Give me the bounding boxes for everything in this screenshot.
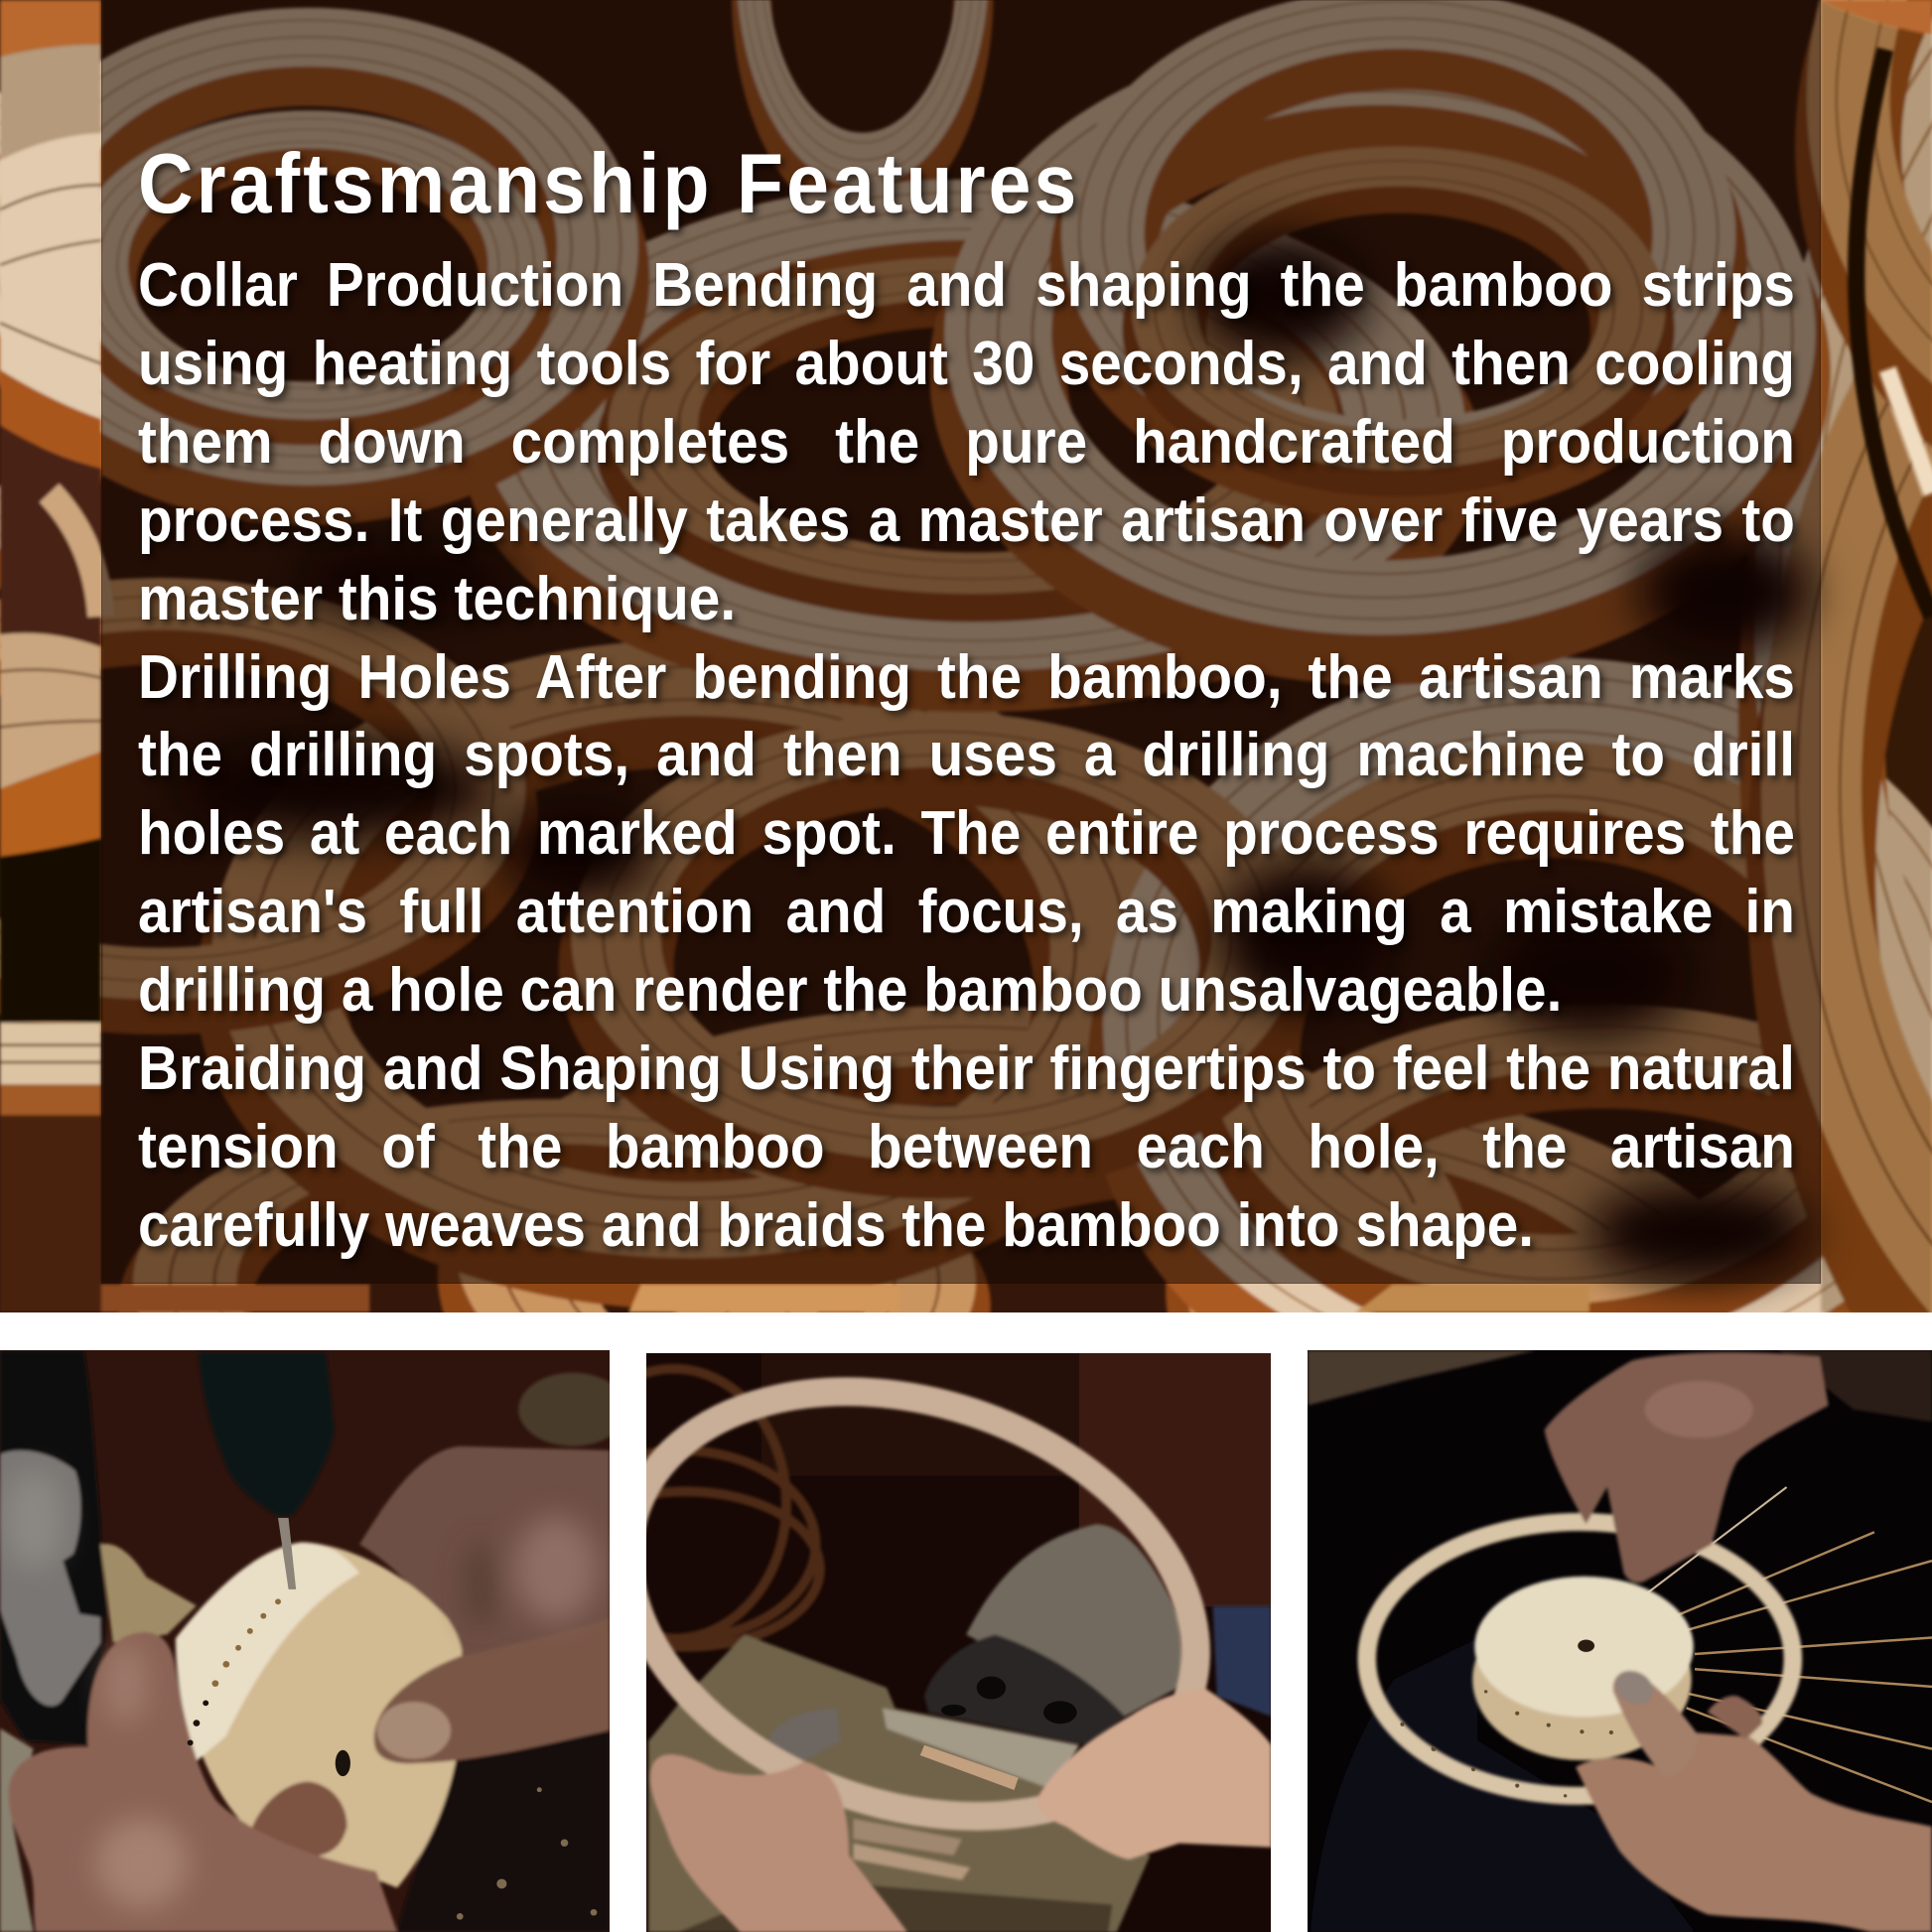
text block: braiding and shaping: Braiding and Shaping Using their fingertips to feel the natural [138,1035,1795,1103]
photo: bending a bamboo hoop over a heater [646,1353,1271,1932]
text block: collar production: them down completes the pure handcrafted production [138,408,1795,477]
text block: drilling holes: artisan's full attention and focus, as making a mistake in [138,878,1795,946]
title: Craftsmanship Features [138,137,1079,231]
background photo: stacked bent bamboo rings [0,0,1932,1312]
dark gaps between stacked rings [173,234,1811,1282]
text block: braiding and shaping [138,1035,1799,1266]
text block: drilling holes: drilling a hole can render the bamboo unsalvageable. [138,956,1562,1025]
text block: braiding and shaping: tension of the bamboo between each hole, the artisan [138,1113,1795,1181]
right edge tint and streaks [1821,0,1932,1312]
text block: drilling holes [138,643,1799,1031]
left edge colour bands [0,0,101,57]
text block: collar production: master this technique. [138,565,736,633]
photo: weaving bamboo strands around a hoop and disc [1308,1350,1932,1932]
text block: collar production: Collar Production Bending and shaping the bamboo strips [138,251,1795,320]
text block: collar production [138,251,1800,639]
text block: drilling holes: holes at each marked spot. The entire process requires the [138,799,1795,868]
panel: translucent dark text panel [101,0,1821,1284]
bottom edge strips [628,1284,899,1312]
text block: collar production: process. It generally takes a master artisan over five years to [138,486,1795,555]
text block: drilling holes: Drilling Holes After bending the bamboo, the artisan marks [138,643,1795,711]
text block: braiding and shaping: carefully weaves and braids the bamboo into shape. [138,1191,1534,1260]
photo: drilling holes in a wooden disc [0,1350,610,1932]
text block: collar production: using heating tools for about 30 seconds, and then cooling [138,330,1795,398]
text block: drilling holes: the drilling spots, and then uses a drilling machine to drill [138,721,1795,789]
